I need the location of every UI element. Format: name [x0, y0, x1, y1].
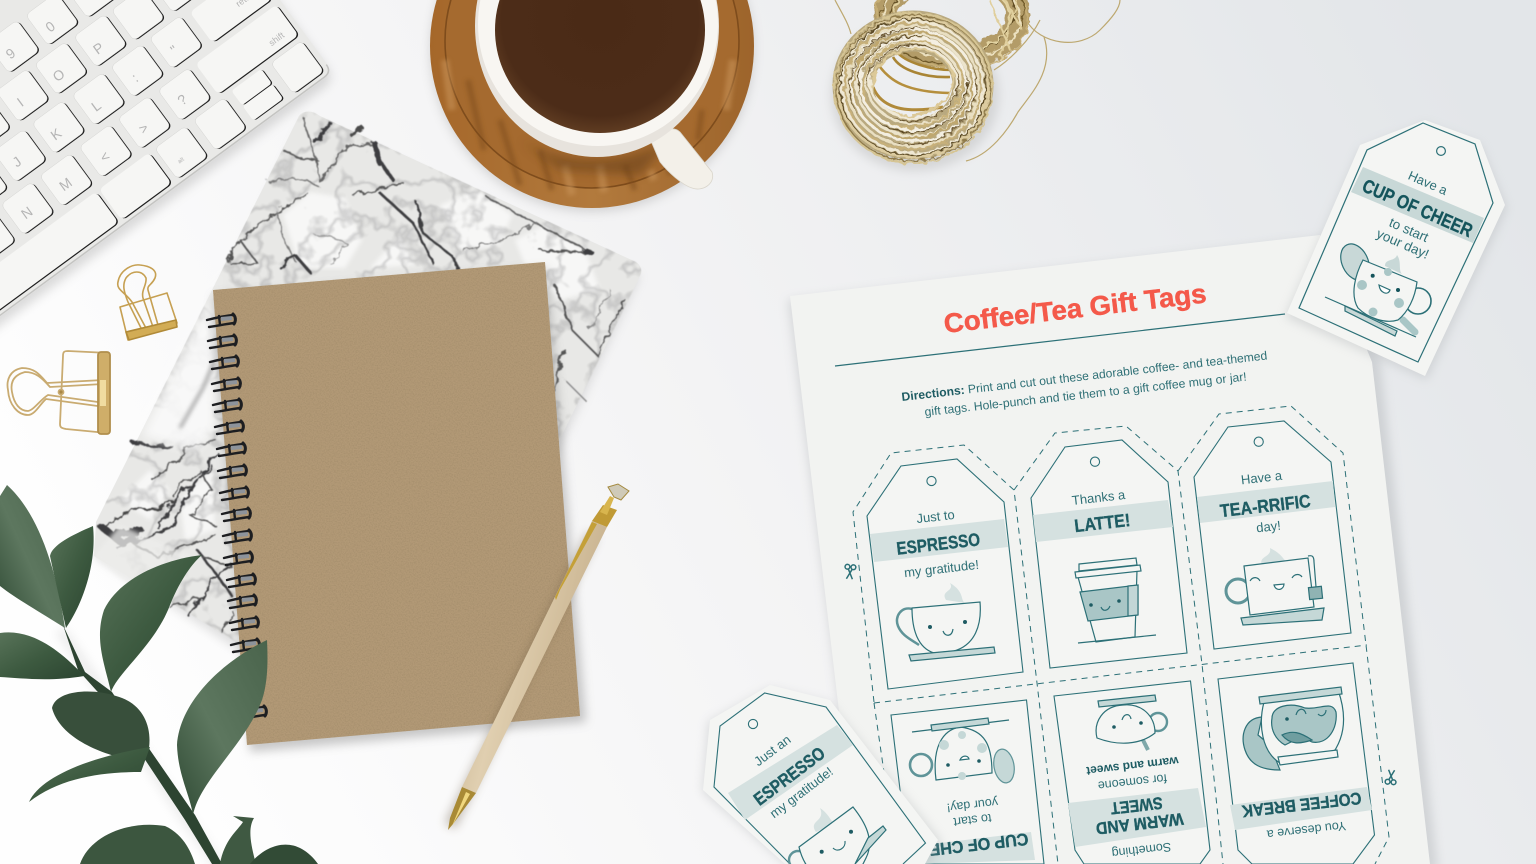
coffee	[495, 0, 705, 133]
marble slab	[94, 112, 641, 690]
marble veins	[103, 117, 625, 632]
tag: espresso: ESPRESSO	[895, 529, 981, 559]
binder clip upper	[118, 265, 177, 340]
stem	[63, 625, 222, 864]
key legends: I	[14, 94, 26, 110]
loose tag: cup of cheer: CUP OF CHEER	[1359, 176, 1476, 242]
tag: coffee break inverted	[1218, 663, 1374, 864]
leaf 7	[177, 640, 267, 815]
flowered mug icon	[910, 718, 1017, 784]
key legends: O	[49, 65, 68, 85]
tag: warm and sweet inverted	[1054, 681, 1210, 864]
tag: espresso	[867, 459, 1023, 689]
cup handle	[651, 129, 713, 189]
tag: cup of cheer inverted: CUP OF CHEER	[906, 829, 1029, 862]
tag: latte	[1031, 440, 1187, 668]
leaf 2	[50, 526, 94, 628]
tag: tea-rrific	[1194, 421, 1351, 649]
directions: Directions: Print and cut out these adorable coffee- and tea-themed	[901, 348, 1268, 404]
gold pen	[448, 484, 629, 830]
keyboard	[0, 0, 335, 494]
tag: latte: Thanks a	[1071, 487, 1127, 508]
leaf 10	[250, 845, 318, 864]
mug icon	[789, 807, 886, 864]
key legends: M	[56, 174, 75, 194]
key legends: 0	[42, 18, 58, 35]
generated marble texture	[94, 112, 641, 680]
loose tag: just an espresso: ESPRESSO	[750, 743, 829, 809]
leaf 9	[220, 816, 256, 864]
key legends: L	[88, 97, 104, 115]
to-go cup icon	[1075, 558, 1156, 643]
spiral binding	[207, 314, 266, 719]
tag: warm and sweet inverted: warm and sweet	[1086, 754, 1180, 778]
key legends: shift	[267, 30, 287, 48]
tag: warm and sweet inverted: Something	[1111, 840, 1172, 860]
tag: warm and sweet inverted: for someone	[1097, 771, 1168, 793]
inner gold loops	[880, 67, 950, 93]
wood grain	[445, 60, 733, 195]
loose tag: cup of cheer: Have a	[1406, 168, 1450, 198]
leaf 3	[100, 555, 202, 692]
pale patches	[120, 190, 600, 540]
printed sheet	[702, 120, 1507, 864]
key legends: ?	[174, 91, 190, 108]
key legends: K	[47, 124, 65, 143]
leaf 4	[0, 632, 84, 679]
wooden coaster	[430, 0, 754, 212]
cut lines	[853, 406, 1389, 864]
header rule	[835, 314, 1285, 366]
key legends: 9	[2, 45, 18, 62]
scissors right	[1385, 770, 1397, 785]
loose tag: just an espresso: my gratitude!	[767, 764, 836, 821]
tag: cup of cheer inverted: to start	[952, 811, 992, 829]
twine	[826, 0, 1120, 172]
tag: latte: LATTE!	[1073, 510, 1131, 536]
binder clip lower	[8, 351, 110, 434]
tag: espresso: my gratitude!	[903, 557, 980, 580]
leaf 8	[80, 825, 195, 864]
loose tag: just an espresso	[702, 685, 942, 864]
rear coil	[869, 0, 1035, 78]
key legends: alt	[177, 157, 186, 165]
tag: tea-rrific: day!	[1255, 518, 1282, 535]
key legends: <	[97, 148, 113, 165]
loose tag: cup of cheer: to start	[1387, 215, 1431, 245]
title: Coffee/Tea Gift Tags	[942, 278, 1208, 339]
main coil	[853, 31, 973, 139]
key legends: J	[9, 153, 24, 170]
loose tag: just an espresso: Just an	[751, 732, 794, 769]
loose tag: cup of cheer: your day!	[1374, 226, 1431, 262]
tag: tea-rrific: Have a	[1240, 468, 1284, 487]
coffee carafe icon	[1243, 687, 1344, 770]
key legends	[0, 0, 313, 258]
mug icon	[897, 583, 995, 661]
directions: gift tags. Hole-punch and tie them to a gift coffee mug or jar!	[924, 370, 1247, 419]
tag: warm and sweet inverted: SWEET	[1109, 793, 1164, 818]
notebook	[207, 262, 586, 752]
tag: coffee break inverted: COFFEE BREAK	[1240, 788, 1362, 821]
tag: cup of cheer inverted	[891, 700, 1044, 864]
tag: coffee break inverted: You deserve a	[1266, 819, 1347, 841]
scissors left	[844, 564, 856, 579]
key legends: >	[135, 119, 151, 137]
leaf 6	[29, 747, 150, 802]
tag: cup of cheer inverted: your day!	[946, 795, 999, 815]
mug with spoon icon	[1096, 695, 1167, 750]
key legends: "	[167, 42, 181, 58]
flowered mug icon	[1325, 239, 1431, 337]
tag: espresso: Just to	[916, 507, 955, 526]
vellum haze	[142, 262, 228, 450]
key legends: N	[18, 203, 36, 222]
tea mug icon	[1226, 548, 1324, 625]
plant	[0, 485, 318, 864]
coffee cup	[475, 0, 719, 189]
leaf 5	[52, 692, 150, 762]
key legends: P	[90, 39, 107, 57]
tag: warm and sweet inverted: WARM AND	[1095, 809, 1184, 838]
loose threads	[835, 0, 1120, 161]
loose tag: cup of cheer	[1285, 120, 1507, 380]
tag: tea-rrific: TEA-RRIFIC	[1219, 491, 1312, 521]
leaf 1	[0, 485, 65, 628]
key legends: :	[128, 70, 141, 85]
